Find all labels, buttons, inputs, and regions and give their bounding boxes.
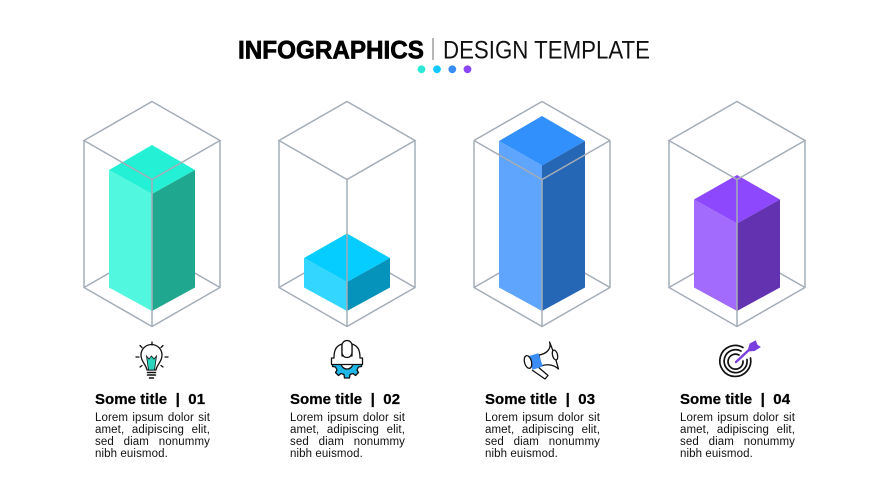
body text 4: amet, adipiscing elit, xyxy=(680,424,795,436)
heading 3: Some title | 03 xyxy=(485,391,595,408)
body text 2: sed diam nonummy xyxy=(290,436,405,448)
heading 2: Some title | 02 xyxy=(290,391,400,408)
body text 3: nibh euismod. xyxy=(485,448,558,460)
body text 4: nibh euismod. xyxy=(680,448,753,460)
body text 2 xyxy=(290,412,405,460)
icon: helmet and gear xyxy=(332,340,362,378)
text block 2 xyxy=(290,391,405,460)
icon: light bulb xyxy=(136,342,168,378)
body text 2: amet, adipiscing elit, xyxy=(290,424,405,436)
cube 2: cyan bar in wireframe box xyxy=(279,102,415,326)
title dots xyxy=(418,65,471,73)
cube 4: purple bar in wireframe box xyxy=(669,102,805,326)
title: INFOGRAPHICS xyxy=(238,36,424,64)
body text 2: Lorem ipsum dolor sit xyxy=(290,412,405,424)
body text 1: amet, adipiscing elit, xyxy=(95,424,210,436)
text block 4 xyxy=(680,391,795,460)
cube 1: teal bar in wireframe box xyxy=(84,102,220,326)
body text 2: nibh euismod. xyxy=(290,448,363,460)
icon: megaphone xyxy=(523,342,559,379)
body text 3: sed diam nonummy xyxy=(485,436,600,448)
body text 1: nibh euismod. xyxy=(95,448,168,460)
text block 1 xyxy=(95,391,210,460)
body text 3: Lorem ipsum dolor sit xyxy=(485,412,600,424)
body text 4: sed diam nonummy xyxy=(680,436,795,448)
heading 4: Some title | 04 xyxy=(680,391,790,408)
body text 4 xyxy=(680,412,795,460)
cube 3: blue bar in wireframe box xyxy=(474,102,610,326)
text block 3 xyxy=(485,391,600,460)
body text 4: Lorem ipsum dolor sit xyxy=(680,412,795,424)
heading 1: Some title | 01 xyxy=(95,391,205,408)
body text 1 xyxy=(95,412,210,460)
body text 3 xyxy=(485,412,600,460)
body text 1: sed diam nonummy xyxy=(95,436,210,448)
body text 3: amet, adipiscing elit, xyxy=(485,424,600,436)
body text 1: Lorem ipsum dolor sit xyxy=(95,412,210,424)
icon: target with dart xyxy=(720,341,760,376)
title: DESIGN TEMPLATE xyxy=(443,36,650,64)
title xyxy=(238,36,650,64)
